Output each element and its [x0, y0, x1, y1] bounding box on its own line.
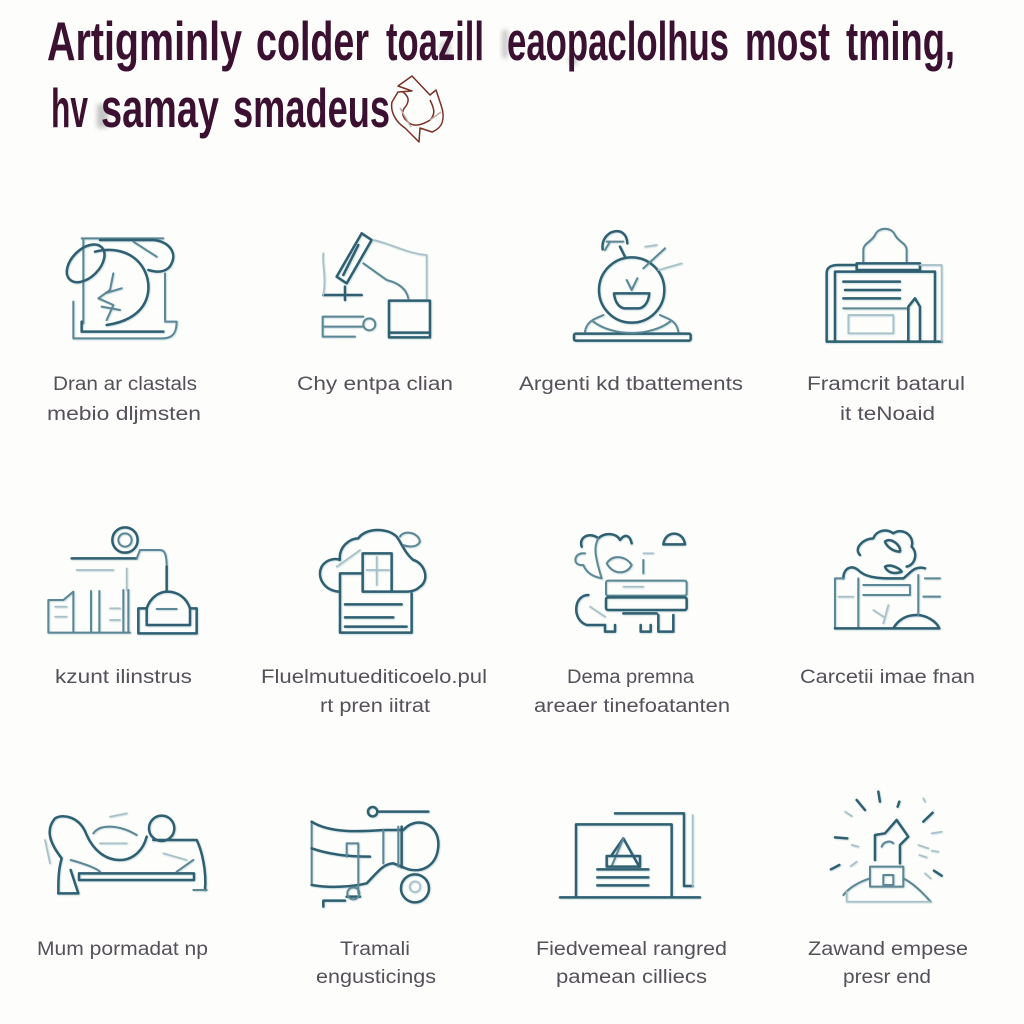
- label: mebio dljmsten: [47, 404, 201, 425]
- title: most: [745, 10, 830, 72]
- icon: globe with bowl: [574, 231, 691, 341]
- label: areaer tinefoatanten: [534, 696, 730, 717]
- label: Carcetii imae fnan: [800, 667, 975, 688]
- label: [316, 939, 436, 988]
- panel: item 1: [47, 237, 201, 425]
- label: kzunt ilinstrus: [55, 667, 192, 688]
- title: Artigminly: [47, 10, 242, 72]
- label: it teNoaid: [840, 404, 935, 425]
- title: colder: [256, 10, 369, 72]
- icon: machine: [312, 807, 438, 907]
- icon: document with dome: [827, 229, 942, 342]
- label: presr end: [843, 967, 931, 988]
- label: [536, 939, 727, 988]
- label: Fluelmutuediticoelo.pul: [261, 667, 487, 688]
- panel: item 5: [48, 527, 197, 688]
- label: Argenti kd tbattements: [519, 374, 743, 395]
- icon: factory and dome: [48, 527, 197, 633]
- title: [47, 10, 955, 139]
- title: toazill: [386, 10, 484, 72]
- icon: slabs and foliage: [575, 534, 687, 632]
- panel: item 4: [807, 229, 965, 425]
- panel: item 8: [800, 531, 975, 688]
- icon: cloud and lamp: [835, 531, 940, 628]
- label: [47, 374, 201, 425]
- title: tming,: [846, 10, 955, 72]
- label: pamean cilliecs: [556, 967, 707, 988]
- panel: item 2: [297, 233, 453, 395]
- icon: reclining figure: [45, 813, 207, 893]
- title: smadeus: [233, 77, 390, 139]
- panel: item 12: [808, 792, 968, 988]
- icon: radiant figure: [831, 792, 942, 902]
- panel: item 7: [534, 534, 730, 717]
- label: Mum pormadat np: [37, 939, 208, 960]
- label: [807, 374, 965, 425]
- title: samay: [101, 77, 219, 139]
- title: eaopaclolhus: [507, 10, 729, 72]
- label: Dran ar clastals: [53, 374, 197, 395]
- panel: item 10: [312, 807, 438, 988]
- panel: item 6: [261, 530, 487, 717]
- panel: item 11: [536, 813, 727, 988]
- icon: recycling arrows: [392, 76, 443, 142]
- panel: item 3: [519, 231, 743, 395]
- icon: cloud and files: [320, 530, 425, 633]
- label: rt pren iitrat: [320, 696, 431, 717]
- label: Chy entpa clian: [297, 374, 453, 395]
- icon: phone: [60, 237, 177, 338]
- title: hv: [51, 77, 88, 139]
- label: Dema premna: [567, 667, 694, 688]
- label: Tramali: [340, 939, 410, 960]
- icon: pen and box: [323, 233, 430, 337]
- label: Fiedvemeal rangred: [536, 939, 727, 960]
- label: [808, 939, 968, 988]
- panel: item 9: [37, 813, 208, 960]
- label: Zawand empese: [808, 939, 968, 960]
- label: Framcrit batarul: [807, 374, 965, 395]
- label: engusticings: [316, 967, 436, 988]
- label: [534, 667, 730, 717]
- label: [261, 667, 487, 717]
- icon: framed pyramid: [560, 813, 700, 897]
